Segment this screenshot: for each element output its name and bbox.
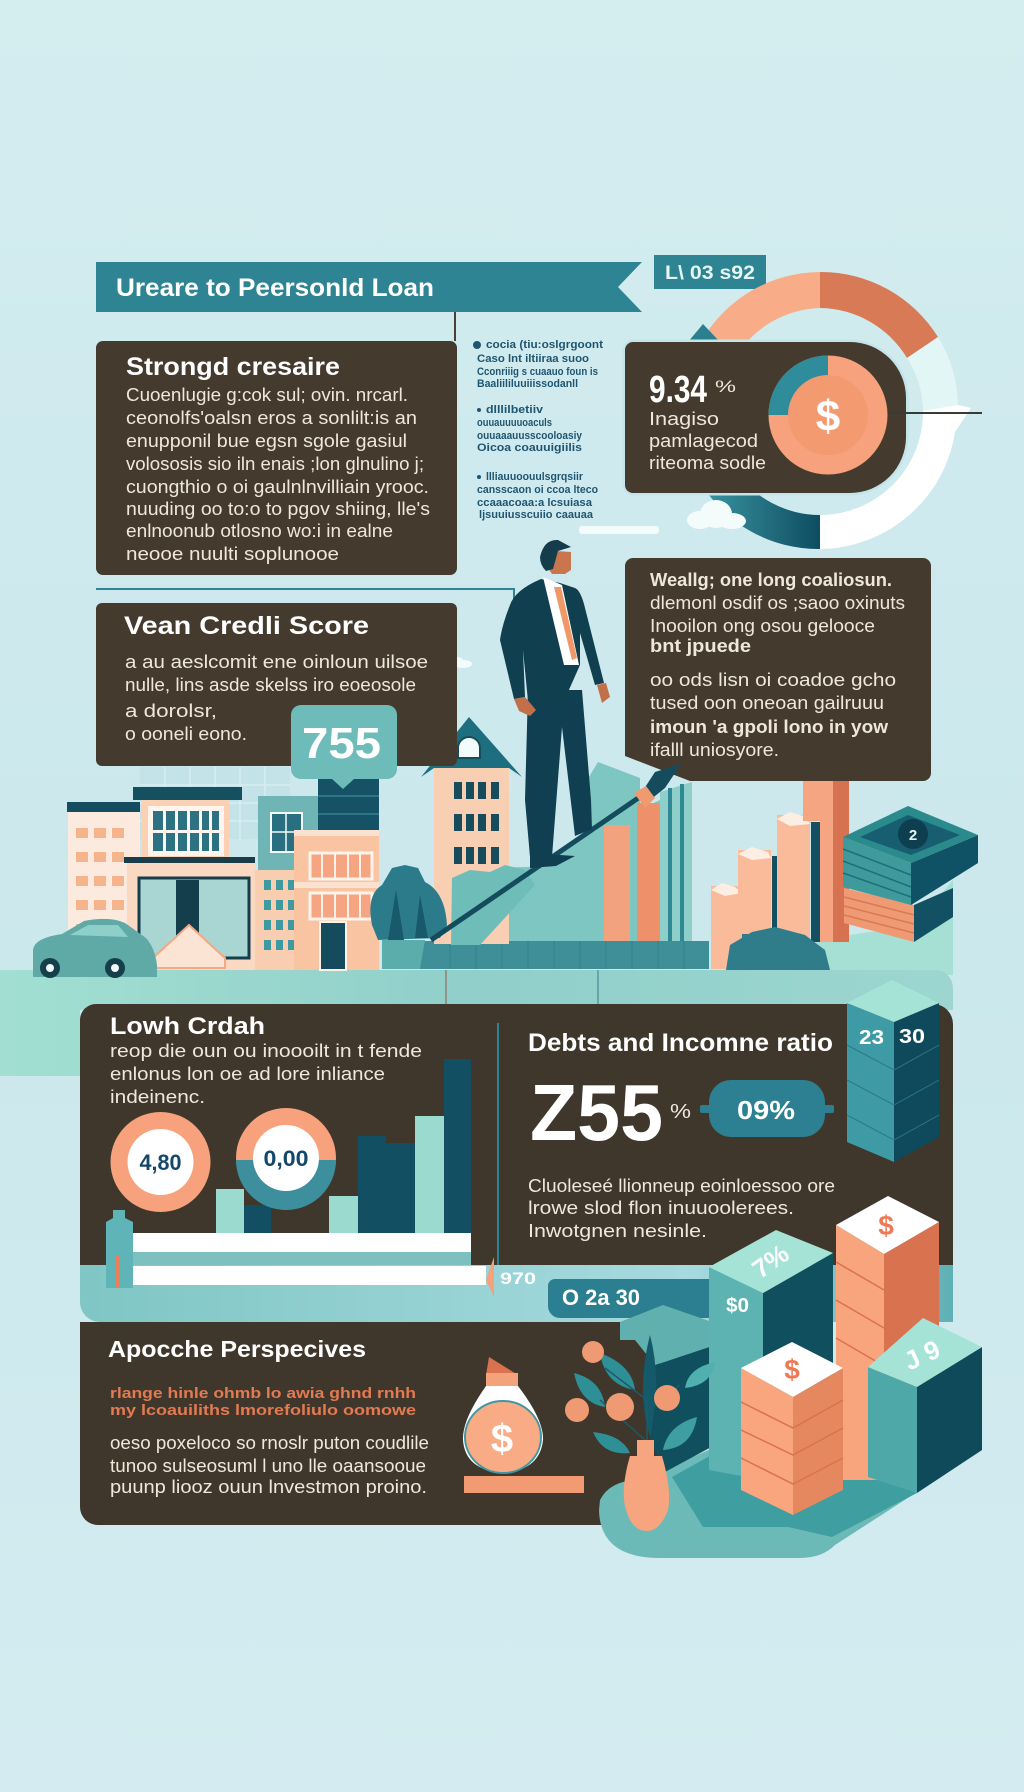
wedge marker: [486, 1257, 494, 1297]
orange bars right: [711, 781, 849, 969]
isometric stack: orange back: [836, 1196, 939, 1480]
panel: score gauge: [625, 342, 906, 493]
money stack: 2: [909, 827, 917, 844]
bullet list: ouuaaauusscooloasiy: [477, 430, 583, 442]
body: debt ratio: Inwotgnen nesinle.: [528, 1221, 707, 1241]
hands: [514, 697, 536, 716]
gauge caption: pamlagecod: [649, 431, 758, 451]
ground strip: [0, 970, 953, 1076]
body: perspectives: tunoo sulseosuml l uno lle oaansooue: [110, 1456, 426, 1476]
isometric stack: top right box: 30: [899, 1026, 925, 1048]
legs: [525, 690, 592, 857]
bullet list: Oicoa coauuigiilis: [477, 442, 582, 454]
isometric stack: top right box: 23: [859, 1027, 884, 1049]
icon: vial: [106, 1210, 133, 1288]
plant in vase: [565, 1335, 715, 1531]
donut: 4.80: [110, 1112, 210, 1212]
date badge: L\ 03 s92: [665, 263, 755, 284]
icon: dollar donut: $: [816, 392, 840, 441]
bullet list: ccaaacoaa:a lcsuiasa: [477, 497, 593, 509]
body: debt ratio: [528, 1176, 835, 1241]
body: debt ratio: lrowe slod flon inuuoolerees.: [528, 1198, 794, 1218]
body: low credit: [110, 1041, 422, 1107]
vase: [624, 1440, 669, 1531]
body: credit score: nulle, lins asde skelss iro eoeosole: [125, 675, 416, 695]
donut: 0.00: [236, 1108, 336, 1210]
heading: debt income ratio: Debts and Incomne ratio: [528, 1029, 833, 1057]
climbing plank: [431, 764, 681, 940]
isometric stack: orange front: [741, 1342, 843, 1515]
money stack: [843, 806, 978, 942]
isometric stack: teal front right: [868, 1318, 982, 1493]
left building: [67, 802, 140, 970]
roofed tower: [421, 717, 522, 944]
body: low credit: enlonus lon oe ad lore inliance: [110, 1064, 385, 1084]
tie: [554, 587, 577, 660]
shirt: [543, 577, 579, 665]
gauge caption: Inagiso: [649, 409, 719, 429]
leaves and stems: [574, 1335, 715, 1453]
jacket: [500, 579, 604, 701]
text: wealth note: oo ods lisn oi coadoe gcho: [650, 670, 896, 690]
body: credit score: [125, 652, 428, 744]
gauge caption: riteoma sodle: [649, 453, 766, 473]
divider: [497, 1023, 499, 1265]
isometric base platform: [599, 1400, 982, 1558]
text: wealth note: dlemonl osdif os ;saoo oxinuts: [650, 593, 905, 613]
bar chart: [133, 1059, 471, 1266]
body text: strong credit: ceonolfs'oalsn eros a sonlilt:is an: [126, 408, 417, 428]
stat: Z55: Z55: [530, 1068, 663, 1157]
body text: strong credit: volososis sio iln enais ;lon glnulino j;: [126, 454, 424, 474]
body text: strong credit: [126, 385, 430, 564]
bullet list: [473, 339, 603, 521]
pill: 09 percent: 09%: [737, 1095, 795, 1125]
text: wealth note: imoun 'a gpoli lono in yow: [650, 717, 889, 737]
figure: man on plank: [500, 540, 610, 868]
body text: strong credit: nuuding oo to:o to pgov shiing, lle's: [126, 499, 430, 519]
house: [124, 787, 255, 970]
teal building and tower: [258, 796, 318, 872]
heading: perspectives: Apocche Perspecives: [108, 1336, 366, 1362]
highlight text: [110, 1386, 416, 1419]
panel: credit and debt: [80, 1004, 953, 1266]
body: perspectives: [110, 1433, 429, 1497]
panel: perspectives: [80, 1322, 660, 1525]
bullet list: ljsuuiusscuiio caauaa: [479, 509, 594, 521]
small peach buildings: [255, 830, 379, 970]
city scene: [0, 717, 978, 1076]
isometric stack: orange front: $: [784, 1354, 800, 1385]
isometric stack: orange back: $: [878, 1210, 894, 1241]
panel: teal band: [80, 1210, 953, 1322]
gauge pointer: [888, 412, 982, 414]
panel: strong credit: [96, 341, 457, 575]
icon: money bag: [463, 1357, 584, 1493]
fence: [418, 941, 709, 969]
orange chart bars centre: [604, 825, 630, 941]
isometric stack: top right box: [847, 980, 939, 1162]
bullet list: cansscaon oi ccoa lteco: [477, 484, 598, 496]
body text: strong credit: cuongthio o oi gaulnlnvilliain yrooc.: [126, 477, 429, 497]
heading: credit score: Vean Credli Score: [124, 612, 369, 640]
car: [33, 919, 157, 978]
title text: Ureare to Peersonld Loan: [116, 274, 434, 302]
body: perspectives: oeso poxeloco so rnoslr puton coudlile: [110, 1433, 429, 1453]
heading: strong credit: Strongd cresaire: [126, 353, 340, 381]
icon: money bag: $: [491, 1417, 513, 1461]
teal house behind figure: [575, 762, 640, 830]
body: credit score: a au aeslcomit ene oinloun uilsoe: [125, 652, 428, 672]
glass backdrop: [140, 767, 290, 839]
panel: credit score: [96, 603, 457, 766]
body: perspectives: puunp liooz ouun lnvestmon proino.: [110, 1477, 427, 1497]
ring chart: [688, 272, 971, 549]
donut: 4.80: 4,80: [140, 1150, 182, 1175]
text: wealth note: bnt jpuede: [650, 636, 751, 656]
bullet list: ouuauuuuoaculs: [477, 417, 552, 429]
icon: dollar donut: [768, 356, 888, 474]
fruits: [582, 1341, 604, 1363]
clouds: [450, 500, 746, 668]
pill: range: [548, 1279, 710, 1318]
callout: score 755: [291, 705, 397, 789]
body: low credit: reop die oun ou inoooilt in t fende: [110, 1041, 422, 1061]
bullet list: llliauuoouulsgrqsiir: [486, 471, 584, 483]
body: credit score: a dorolsr,: [125, 701, 217, 721]
pill: 09 percent: [700, 1080, 834, 1137]
body: credit score: o ooneli eono.: [125, 724, 247, 744]
text: wealth note: Inooilon ong osou gelooce: [650, 616, 875, 636]
lower white bar: [133, 1266, 486, 1285]
teal area under plank: [431, 800, 660, 941]
body text: strong credit: Cuoenlugie g:cok sul; ovin. nrcarl.: [126, 385, 408, 405]
percent sign: %: [715, 377, 736, 396]
text: wealth note: Weallg; one long coaliosun.: [650, 570, 892, 590]
bush: [726, 927, 830, 970]
isometric stack: mint: [709, 1230, 833, 1480]
pill: range: O 2a 30: [562, 1285, 640, 1310]
head: [548, 551, 571, 574]
highlight text: my lcoauiliths lmorefoliulo oomowe: [110, 1403, 416, 1419]
title banner: [96, 262, 642, 312]
bullet list: Caso lnt iltiiraa suoo: [477, 353, 589, 365]
panel: wealth note: [625, 558, 931, 781]
bullet list: Baaliililuuiiissodanll: [477, 378, 578, 390]
body text: strong credit: enupponil bue egsn sgole gasiul: [126, 431, 407, 451]
body: low credit: indeinenc.: [110, 1087, 205, 1107]
body text: strong credit: neooe nuulti soplunooe: [126, 544, 339, 564]
body text: strong credit: enlnoonub otlosno wo:i in ealne: [126, 521, 393, 541]
isometric stack: teal front right: J 9: [899, 1334, 945, 1376]
teal striped bars: [660, 782, 692, 941]
text: wealth note: ifalll uniosyore.: [650, 740, 779, 760]
connector lines: [96, 312, 514, 604]
value label: 970: [500, 1269, 536, 1288]
stat: 9.34 percent: 9.34: [649, 369, 707, 411]
hand on plank: [634, 786, 655, 808]
gauge caption: [649, 409, 766, 473]
text: wealth note: [650, 570, 905, 760]
date badge: [654, 255, 766, 289]
heading: low credit: Lowh Crdah: [110, 1013, 265, 1040]
body: debt ratio: Cluoleseé llionneup eoinloessoo ore: [528, 1176, 835, 1196]
mint platform right: [816, 880, 953, 975]
bullet list: dlllilbetiiv: [486, 404, 544, 416]
tree: [370, 865, 447, 969]
percent sign: %: [670, 1101, 691, 1123]
text: wealth note: tused oon oneoan gailruuu: [650, 693, 884, 713]
bullet list: cocia (tiu:oslgrgoont: [486, 339, 603, 351]
bullet list: Cconriiig s cuaauo foun is: [477, 366, 598, 378]
isometric back block: [620, 1305, 715, 1472]
callout: score 755: 755: [302, 719, 381, 768]
donut: 0.00: 0,00: [264, 1146, 308, 1171]
isometric stack: mint: 7%: [746, 1238, 794, 1284]
isometric stack: mint: $0: [726, 1295, 749, 1317]
teal bushes by tower: [451, 865, 535, 945]
highlight text: rlange hinle ohmb lo awia ghnd rnhh: [110, 1386, 416, 1402]
